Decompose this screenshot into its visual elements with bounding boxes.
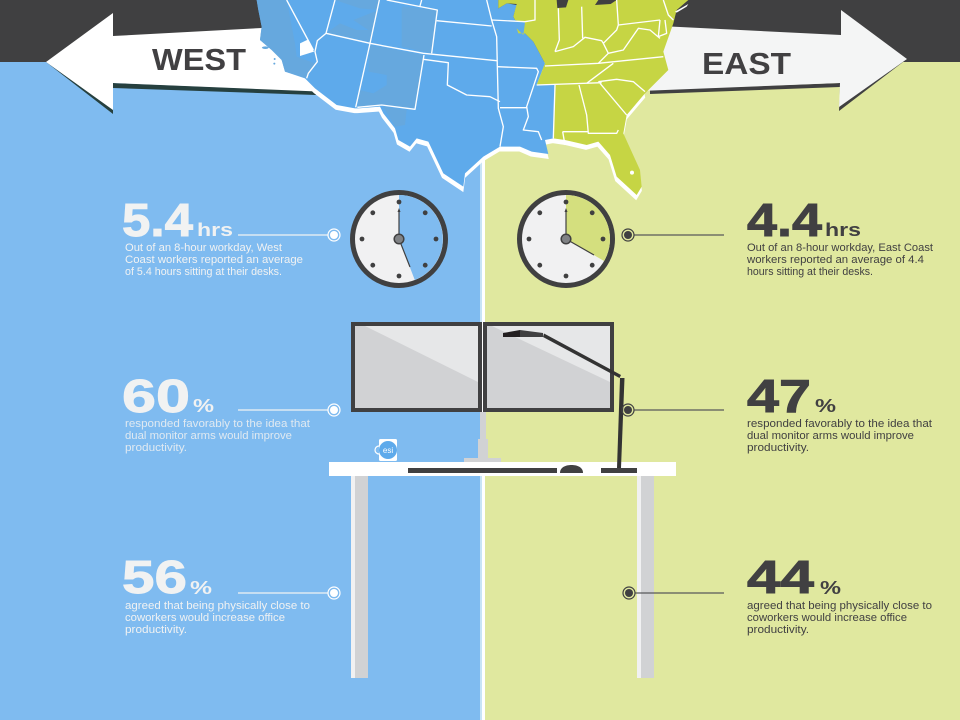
stat: east monitors: [747, 370, 932, 454]
panel: west background: [0, 0, 480, 720]
connector: west hours: [238, 229, 340, 241]
stat: east hours: Out of an 8-hour workday, East Coast: [747, 242, 933, 254]
left leg: [351, 476, 368, 678]
connector: east monitors: [622, 404, 724, 416]
monitor: right: [485, 324, 612, 410]
stat: west hours: [122, 194, 303, 278]
desk: [329, 462, 676, 678]
map west states: [257, 0, 555, 187]
stat: west monitors: responded favorably to the idea that: [125, 418, 310, 430]
stat: west monitors: [122, 370, 310, 454]
stat: east monitors: 47: [747, 370, 811, 422]
stat: east hours: hrs: [825, 220, 861, 240]
stat: east hours: 4.4: [747, 194, 822, 246]
lamp: [503, 330, 637, 473]
center divider: [480, 62, 485, 720]
label: WEST: WEST: [152, 42, 246, 77]
map state borders: [287, 0, 673, 147]
connector: east proximity: [623, 587, 724, 599]
monitor stand: [464, 412, 501, 463]
stat: east proximity: agreed that being physically close to: [747, 600, 932, 612]
stat: east monitors: dual monitor arms would improve: [747, 430, 914, 442]
stat: west monitors: dual monitor arms would improve: [125, 430, 292, 442]
stat: west hours: hrs: [197, 220, 233, 240]
stat: west hours: Out of an 8-hour workday, West: [125, 242, 282, 254]
stat: east monitors: %: [815, 396, 836, 416]
map Nevada gap and islands: [300, 4, 688, 175]
right leg: [637, 476, 654, 678]
keyboard: [408, 468, 557, 473]
stat: west monitors: productivity.: [125, 442, 187, 454]
map of United States: [257, 0, 688, 199]
stat: west proximity: coworkers would increase office: [125, 612, 285, 624]
mouse: [560, 465, 583, 473]
desk top: [329, 462, 676, 476]
stat: east proximity: 44: [747, 551, 815, 603]
stat: east hours: [746, 194, 933, 278]
stat: west proximity: productivity.: [125, 624, 187, 636]
stat: east proximity: %: [820, 578, 841, 598]
stat: west proximity: agreed that being physically close to: [125, 600, 310, 612]
connector: west proximity: [238, 587, 340, 599]
label: EAST: EAST: [702, 46, 791, 81]
stat: west proximity: 56: [122, 551, 187, 603]
mug: [375, 439, 397, 461]
stat: east monitors: productivity.: [747, 442, 809, 454]
stat: east proximity: coworkers would increase office: [747, 612, 907, 624]
stat: west hours: 5.4: [122, 194, 193, 246]
connector: east hours: [622, 229, 724, 241]
map channel islands: [262, 46, 276, 65]
stat: west hours: Coast workers reported an average: [125, 254, 303, 266]
map east states: [498, 0, 688, 195]
clock: west: [352, 192, 446, 286]
clock: east: [520, 192, 612, 286]
stat: east hours: workers reported an average of 4.4: [746, 254, 924, 266]
stat: east proximity: [747, 551, 932, 636]
stat: west hours: of 5.4 hours sitting at their desks.: [125, 266, 282, 278]
map darker blue patches: [257, 0, 437, 127]
stat: west proximity: [122, 551, 310, 636]
stat: east hours: hours sitting at their desks.: [747, 266, 873, 278]
stat: east proximity: productivity.: [747, 624, 809, 636]
stat: east monitors: responded favorably to the idea that: [747, 418, 932, 430]
arrow: west: [46, 13, 330, 114]
stat: west monitors: %: [193, 396, 214, 416]
stat: west monitors: 60: [122, 370, 190, 422]
top dark band: [0, 0, 960, 62]
monitor: left: [353, 324, 480, 410]
map lakes: [557, 0, 617, 8]
connector: west monitors: [238, 404, 340, 416]
panel: east background: [484, 0, 960, 720]
mug: esi: [383, 446, 393, 455]
map white coast shadow: [284, 71, 644, 199]
arrow: east: [640, 10, 907, 111]
stat: west proximity: %: [190, 578, 212, 598]
